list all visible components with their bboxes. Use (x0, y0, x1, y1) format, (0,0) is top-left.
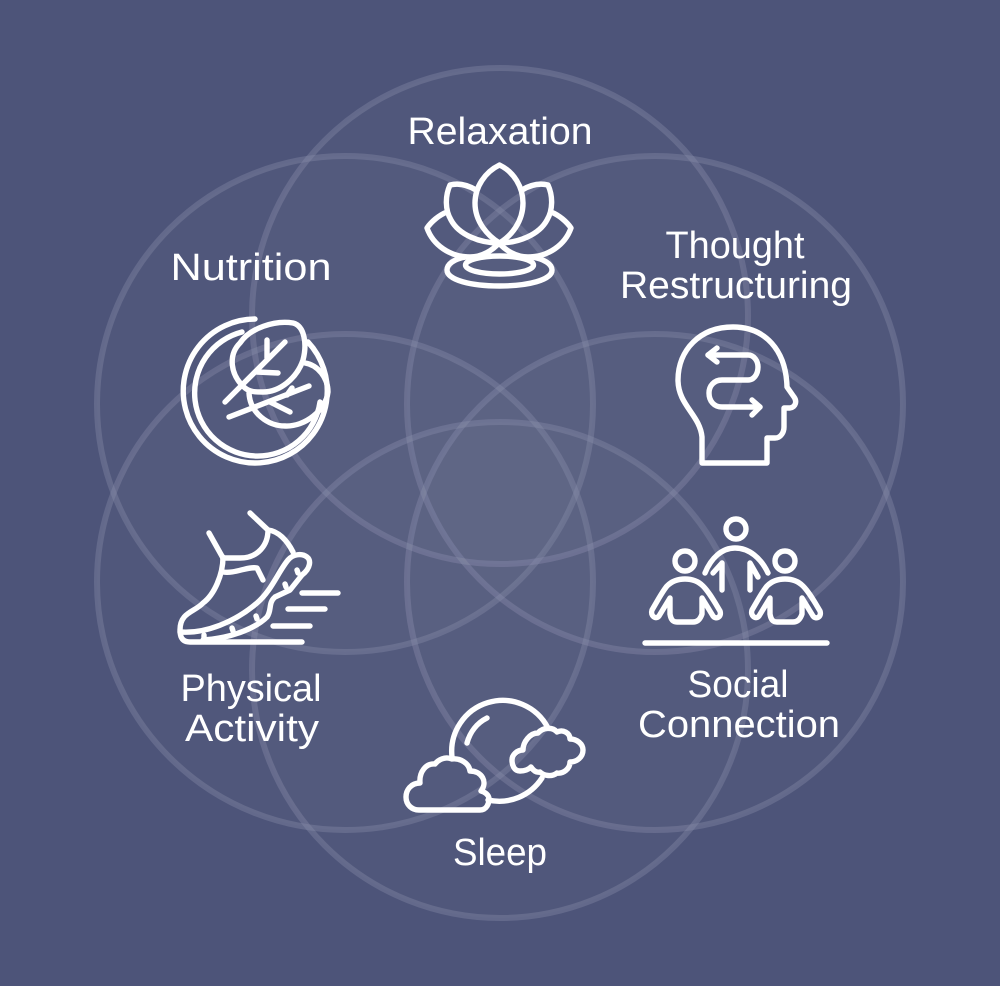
label: Relaxation: Relaxation (408, 111, 592, 153)
icon: lotus (427, 165, 571, 286)
label: Sleep: Sleep (453, 832, 547, 874)
label: Thought Restructuring: Restructuring (620, 265, 852, 307)
icon: three people (645, 519, 827, 643)
label: Physical Activity (180, 668, 322, 750)
icon: leaves on a plate (183, 319, 328, 463)
icon: moon and clouds (406, 700, 583, 810)
label: Social Connection: Connection (638, 704, 840, 746)
label: Nutrition: Nutrition (170, 247, 332, 289)
icon: running shoe (180, 513, 338, 642)
overlapping circles (97, 68, 903, 918)
label: Thought Restructuring: Thought (666, 225, 805, 267)
label: Social Connection (638, 664, 840, 746)
label: Physical Activity: Activity (185, 708, 319, 750)
icon: head with arrows (678, 327, 796, 463)
label: Social Connection: Social (688, 664, 788, 706)
label: Physical Activity: Physical (180, 668, 322, 710)
label: Thought Restructuring (620, 225, 852, 307)
